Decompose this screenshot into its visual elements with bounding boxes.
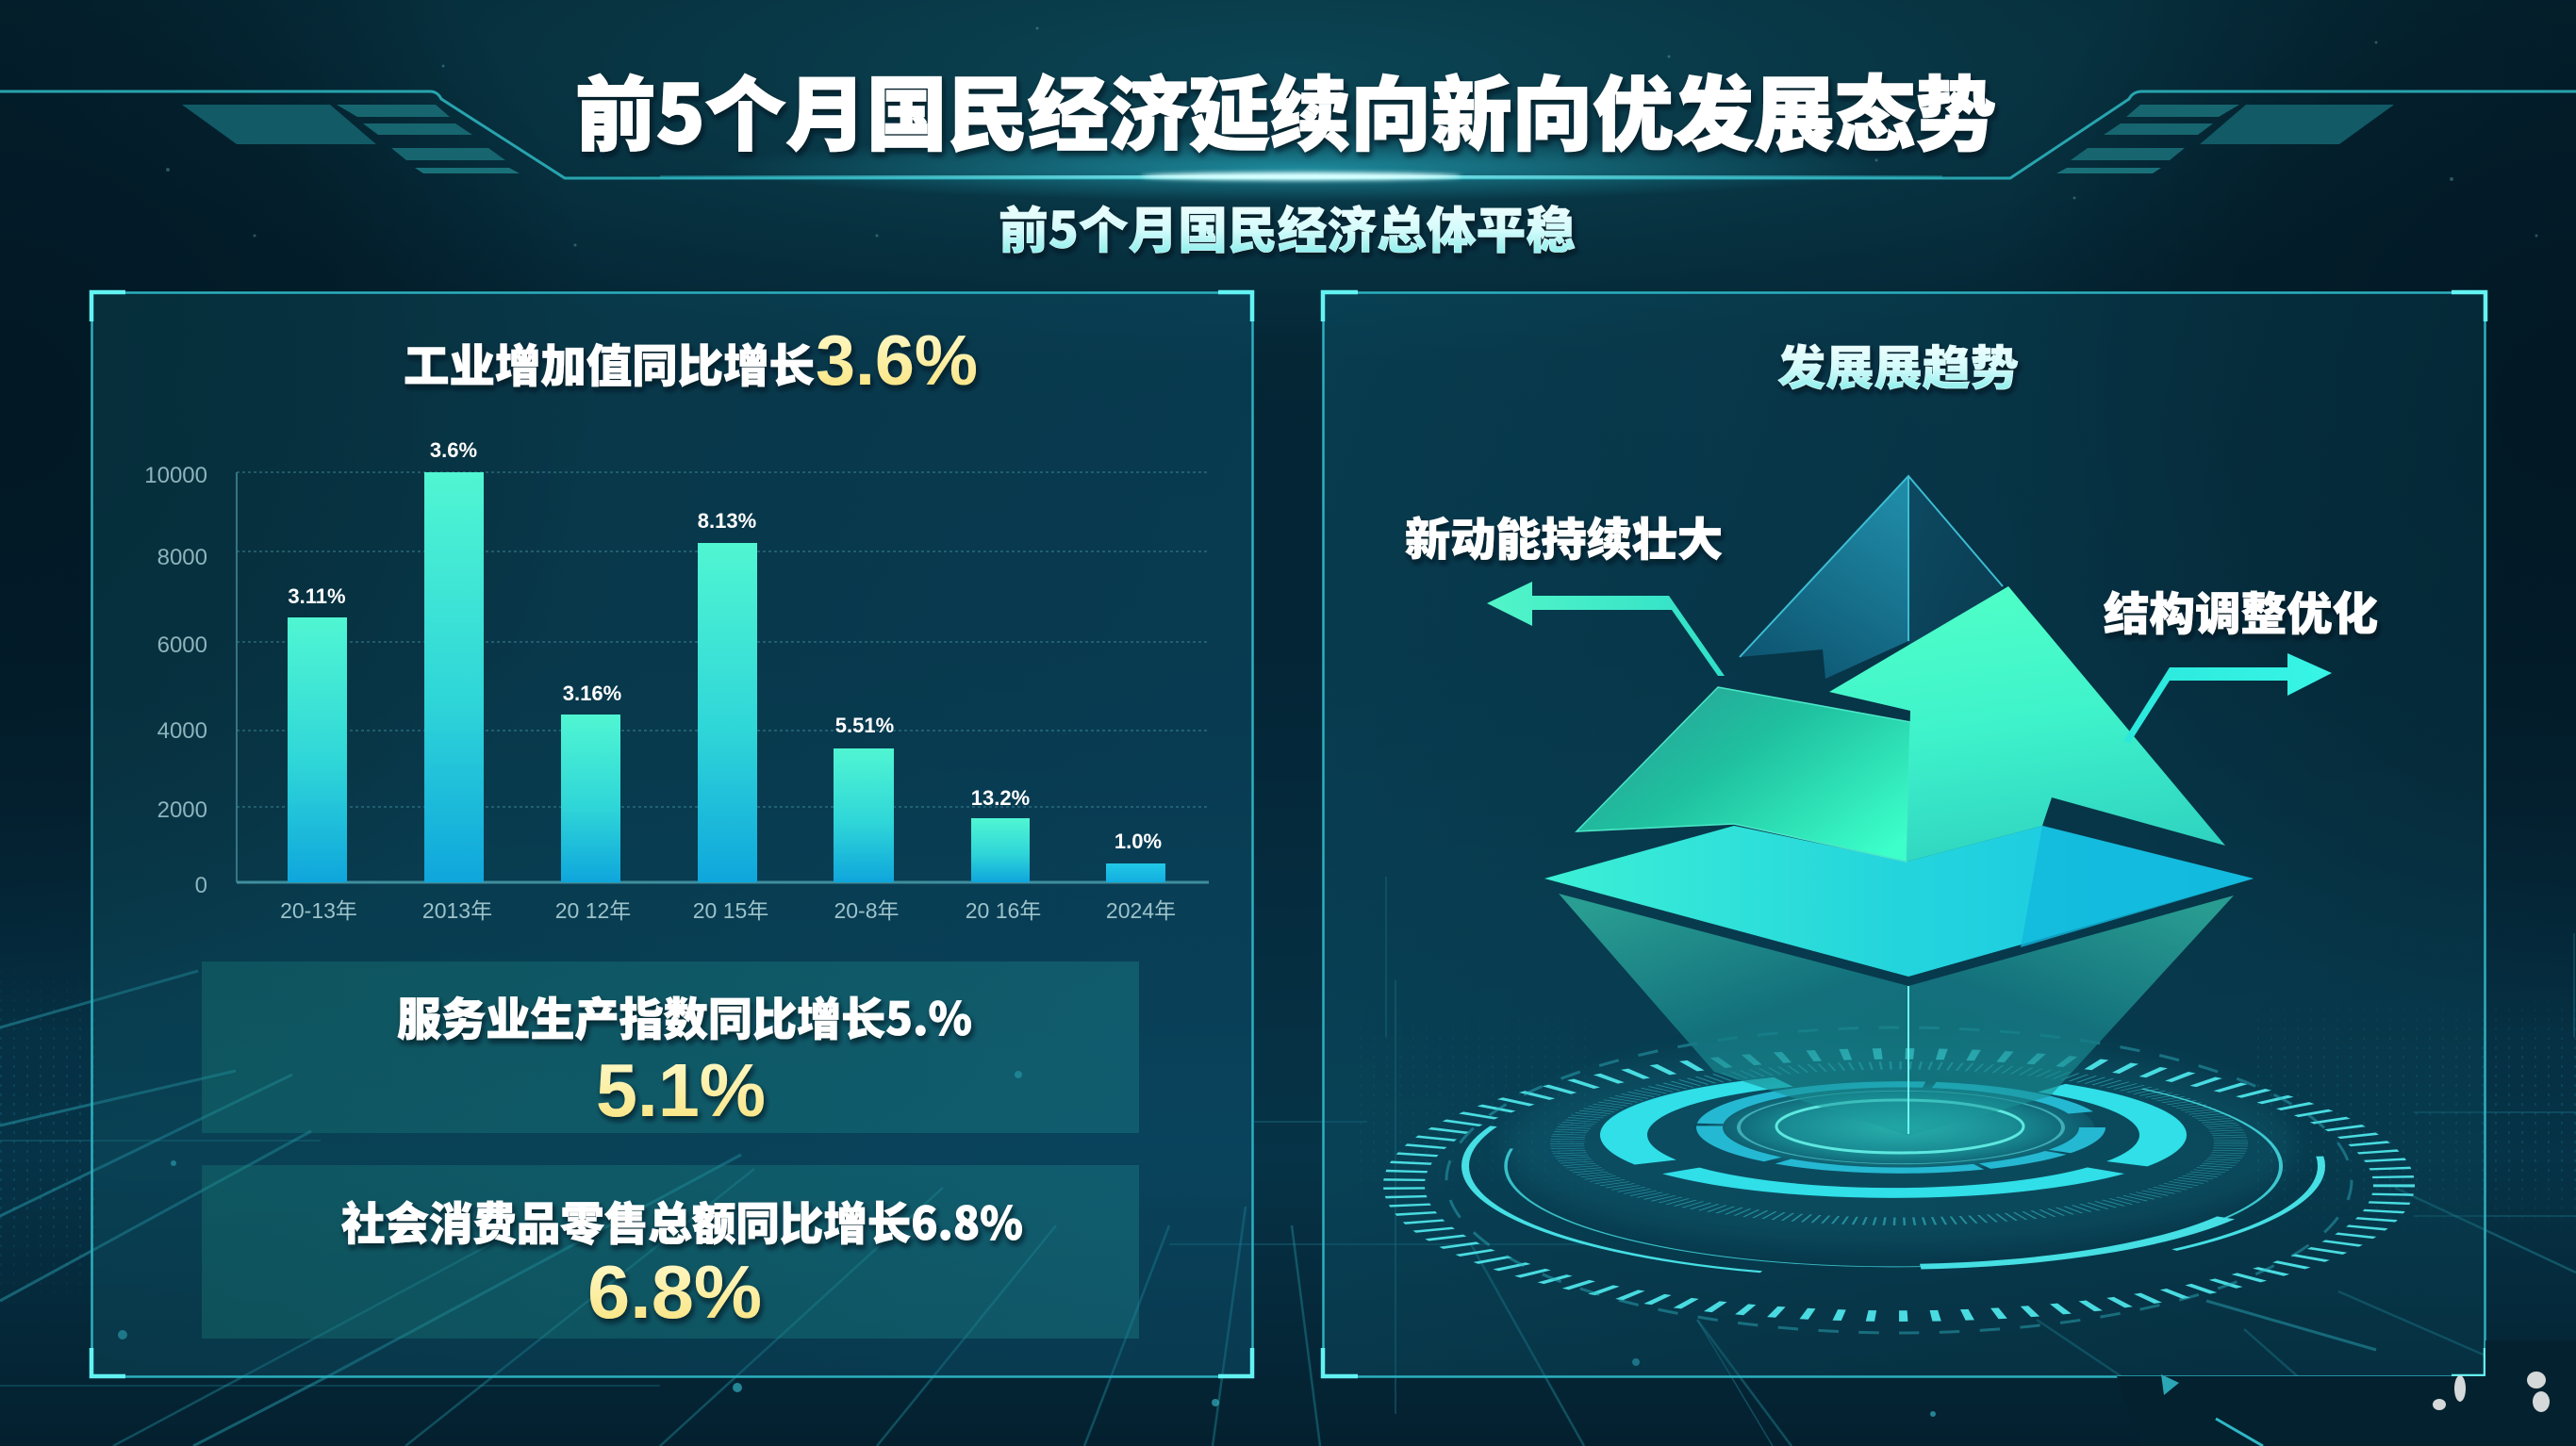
right green arrow — [1829, 586, 2225, 862]
pyramid graphic — [1544, 476, 2254, 1136]
left green arrow — [1577, 687, 1910, 862]
panel: development trend — [1323, 292, 2485, 1376]
bar chart: 0 — [195, 873, 207, 898]
center disc — [1708, 1084, 2094, 1171]
arrow: new momentum — [1487, 582, 1725, 676]
panel: industrial output — [91, 292, 1252, 1376]
bar chart: 2000 — [157, 797, 207, 823]
bar chart — [144, 438, 1209, 923]
segmented inner ring — [1709, 1084, 2092, 1171]
card: retail sales: 社会消费品零售总额同比增长6.8% — [341, 1187, 1023, 1253]
card: services index — [202, 961, 1139, 1133]
bar chart: 4000 — [157, 718, 207, 744]
bar chart: 2013年 — [422, 898, 492, 923]
subtitle: 前5个月国民经济总体平稳 — [999, 191, 1576, 263]
title: 前5个月国民经济延续向新向优发展态势 — [575, 49, 1996, 167]
panel heading — [404, 320, 978, 400]
card: retail sales — [202, 1165, 1139, 1339]
bar chart: 20-13年 — [280, 898, 357, 923]
bar chart: 5.51% — [835, 714, 894, 737]
bar chart: 20 16年 — [966, 898, 1041, 923]
bar chart: 20 15年 — [693, 898, 768, 923]
bar chart: 3.16% — [563, 682, 621, 705]
bar chart: 2024年 — [1106, 898, 1176, 923]
bar chart: 3.6% — [430, 438, 477, 462]
panel heading: 3.6% — [816, 320, 978, 400]
hologram rings — [1347, 1024, 2439, 1333]
card: services index: 服务业生产指数同比增长5.% — [397, 982, 972, 1048]
bar chart: 8.13% — [698, 509, 756, 533]
bar chart: 1.0% — [1115, 830, 1162, 853]
dashed top arc — [1446, 1027, 2352, 1333]
tick ring — [1404, 1054, 2394, 1316]
bar chart: 20-8年 — [834, 898, 900, 923]
watermark smudge — [2117, 1340, 2576, 1446]
bar chart: 6000 — [157, 633, 207, 658]
card: retail sales: 6.8% — [587, 1250, 762, 1334]
bar chart: 3.11% — [288, 584, 346, 608]
thin rings — [1347, 1024, 2439, 1308]
back pyramid — [1740, 476, 2003, 679]
thick arcs — [1515, 1054, 2271, 1216]
arrow: structure optimisation — [2123, 653, 2332, 743]
bar chart: 20 12年 — [555, 898, 631, 923]
label: structure optimisation: 结构调整优化 — [2104, 577, 2378, 643]
dotted inner ring — [1567, 1065, 2231, 1222]
panel heading: 工业增加值同比增长 — [404, 329, 815, 395]
card: services index: 5.1% — [596, 1048, 766, 1132]
bar chart: 13.2% — [971, 786, 1030, 810]
bar chart: 10000 — [144, 463, 207, 488]
header frame — [0, 91, 2576, 202]
label: new momentum: 新动能持续壮大 — [1405, 502, 1723, 568]
plate — [1544, 826, 2254, 977]
lower pyramid — [1559, 894, 2234, 1136]
bar chart: 8000 — [157, 545, 207, 570]
panel heading: 发展展趋势 — [1777, 331, 2019, 399]
